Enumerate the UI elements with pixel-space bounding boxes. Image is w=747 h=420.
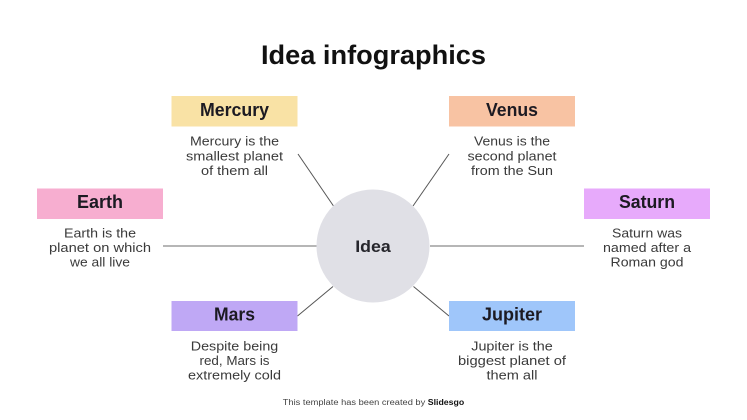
panel: Venus: Venus [486,100,538,120]
footer credit [283,398,465,407]
panel: Jupiter: Jupiter [482,304,542,324]
central circle: Idea: Idea [355,237,391,256]
panel: Mars: Despite being [191,338,278,354]
panel: Earth: Earth is the [64,225,136,240]
panel: Jupiter: Jupiter is the [471,338,553,354]
panel: Mercury: of them all [201,163,268,178]
central circle: Idea [316,190,430,302]
panel: Saturn: Saturn [619,192,675,212]
panel: Mercury: Mercury [200,100,269,120]
panel: Venus [449,96,575,178]
panel: Mercury [172,96,298,178]
panel: Earth: we all live [69,254,130,270]
panel: Saturn: Roman god [610,254,684,270]
panel: Mercury: smallest planet [186,148,283,164]
panel: Earth [37,188,163,270]
connector lines [163,154,584,316]
footer credit: This template has been created by [283,398,425,407]
panel: Earth: Earth [77,192,123,212]
panel: Saturn: Saturn was [612,225,683,240]
panel: Saturn [584,188,710,270]
panel: Mars: red, Mars is [200,353,270,368]
panel: Mars: extremely cold [188,368,281,382]
panel: Mercury: Mercury is the [190,134,279,149]
panel: Jupiter: them all [486,368,538,382]
panel: Mars: Mars [214,304,255,324]
panel: Saturn: named after a [603,240,692,255]
panel: Venus: Venus is the [474,134,550,149]
panel: Earth: planet on which [49,240,151,255]
panel: Venus: second planet [468,148,557,164]
title: Idea infographics [261,40,486,70]
footer credit: Slidesgo [428,398,465,407]
panel: Mars [172,301,298,382]
panel: Venus: from the Sun [471,163,553,178]
panel: Jupiter [449,301,575,382]
panel: Jupiter: biggest planet of [458,353,566,368]
